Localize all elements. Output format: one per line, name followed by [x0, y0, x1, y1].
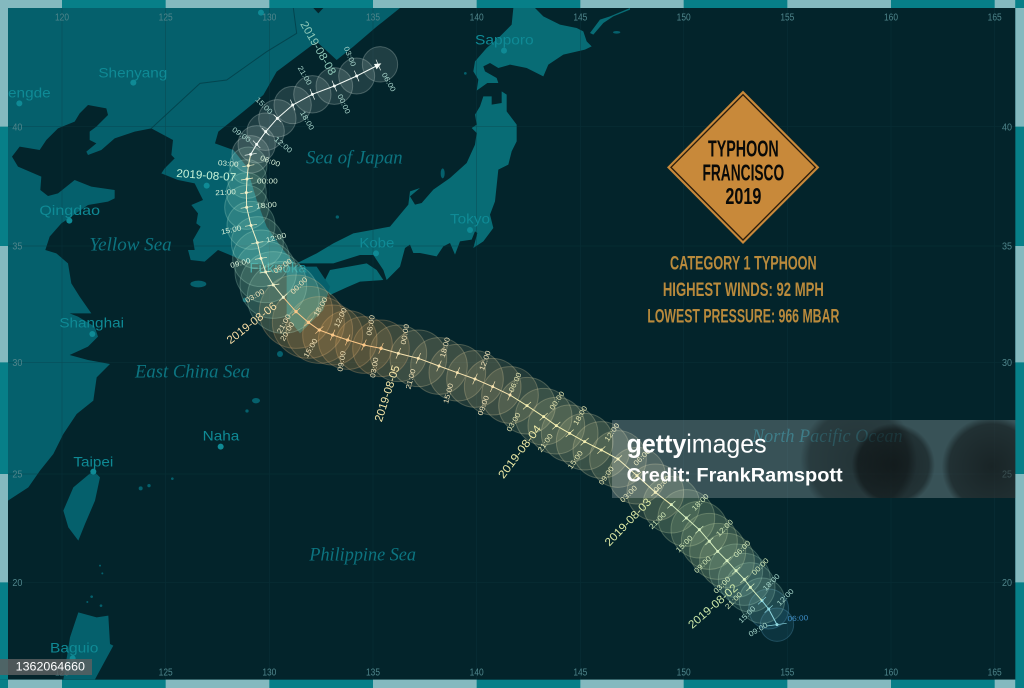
time labels along the track: 00:00 [257, 177, 278, 186]
axis labels: longitude and latitude: 35 [12, 242, 23, 253]
time labels along the track: 00:00 [288, 275, 309, 296]
sea labels: East China Sea [134, 361, 250, 382]
land: Luzon [63, 612, 113, 679]
axis labels: longitude and latitude: 125 [159, 668, 173, 679]
axis labels: longitude and latitude: 160 [884, 668, 898, 679]
land: Jeju and small islands [86, 31, 620, 607]
city labels and dots: Tokyo [450, 210, 490, 226]
date labels along the track: 2019-08-08 [297, 20, 338, 77]
time labels along the track: 00:00 [750, 556, 771, 577]
border: bottom scale [0, 680, 1024, 688]
land: Shikoku [323, 263, 383, 295]
date labels along the track: 2019-08-02 [686, 582, 740, 631]
watermark logo text: gettyimages [627, 428, 767, 458]
time labels along the track: 18:00 [761, 572, 782, 593]
time labels along the track: 12:00 [775, 587, 796, 608]
axis labels: longitude and latitude: 30 [1002, 358, 1012, 369]
city labels and dots: Fukuoka [249, 260, 307, 276]
date labels along the track: 2019-08-03 [603, 496, 654, 549]
time labels along the track: 00:00 [547, 390, 567, 412]
time labels along the track: 21:00 [536, 432, 555, 454]
time labels along the track: 18:00 [690, 492, 711, 513]
time labels along the track: 06:00 [631, 447, 652, 468]
time labels along the track: 03:00 [618, 483, 639, 504]
land: Taiwan [63, 471, 100, 541]
time labels along the track: 21:00 [723, 590, 744, 611]
border: right scale [1015, 0, 1024, 688]
time labels along the track: 09:00 [335, 350, 348, 372]
axis labels: longitude and latitude: 20 [1002, 578, 1012, 589]
axis labels: longitude and latitude: 135 [366, 668, 380, 679]
axis labels: longitude and latitude: 25 [1002, 470, 1012, 481]
time labels along the track: 09:00 [476, 394, 491, 417]
time labels along the track: 15:00 [301, 337, 320, 359]
city labels and dots: Shenyang [98, 64, 167, 80]
time labels along the track: 03:00 [504, 411, 523, 433]
city labels and dots: Baguio [50, 639, 99, 655]
border: left scale [0, 8, 8, 680]
sea labels: Philippine Sea [308, 545, 416, 566]
time labels along the track: 09:00 [692, 554, 713, 575]
city labels and dots: Sapporo [475, 31, 534, 47]
time labels along the track: 12:00 [332, 306, 349, 329]
storm statistics text: HIGHEST WINDS: 92 MPH [663, 280, 824, 301]
time labels along the track: 06:00 [507, 371, 524, 394]
storm track line with ticks and points [240, 60, 787, 626]
image id badge [0, 659, 92, 675]
land: Honshu [297, 91, 517, 280]
land: Kuril tips [590, 8, 630, 35]
city labels and dots: Taipei [73, 454, 113, 470]
time labels along the track: 06:00 [272, 256, 294, 276]
time labels along the track: 12:00 [272, 135, 294, 155]
storm statistics text: CATEGORY 1 TYPHOON [670, 254, 817, 275]
date labels along the track: 2019-08-04 [496, 423, 544, 481]
land: Hokkaido [473, 8, 592, 91]
time labels along the track: 18:00 [438, 336, 452, 358]
time labels along the track: 03:00 [711, 574, 732, 595]
time labels along the track: 12:00 [265, 231, 287, 245]
time labels along the track: 06:00 [731, 538, 752, 559]
axis labels: longitude and latitude: 150 [677, 12, 691, 23]
time labels along the track: 00:00 [651, 473, 672, 494]
time labels along the track: 03:00 [244, 287, 266, 305]
time labels along the track: 21:00 [296, 64, 314, 87]
axis labels: longitude and latitude: 30 [12, 358, 23, 369]
time labels along the track: 18:00 [311, 296, 330, 318]
axis labels: longitude and latitude: 35 [1002, 242, 1012, 253]
axis labels: longitude and latitude: 155 [780, 12, 795, 23]
axis labels: longitude and latitude: 140 [470, 668, 484, 679]
border: top scale [0, 0, 1024, 8]
time labels along the track: 09:00 [230, 125, 252, 144]
time labels along the track: 15:00 [220, 223, 242, 236]
map: land masses [8, 8, 630, 679]
time labels along the track: 09:00 [229, 256, 251, 270]
time labels along the track: 15:00 [441, 382, 455, 404]
axis labels: longitude and latitude: 130 [262, 668, 277, 679]
image id badge: 1362064660 [16, 660, 85, 674]
date labels along the track: 2019-08-07 [176, 168, 237, 184]
title text: FRANCISCO [702, 159, 784, 185]
time labels along the track: 15:00 [254, 95, 275, 116]
axis labels: longitude and latitude: 125 [159, 12, 173, 23]
title text: 2019 [725, 183, 761, 209]
watermark band [612, 420, 1016, 498]
date labels along the track [176, 20, 740, 631]
time labels along the track: 21:00 [404, 368, 418, 390]
axis labels: longitude and latitude: 135 [366, 12, 380, 23]
city labels and dots [8, 10, 534, 661]
axis labels: longitude and latitude: 145 [573, 668, 588, 679]
axis labels: longitude and latitude: 25 [12, 470, 23, 481]
time labels along the track: 21:00 [275, 313, 293, 335]
road-sign title diamond [667, 91, 819, 244]
time labels along the track: 15:00 [566, 449, 585, 471]
land border lines [151, 8, 297, 128]
axis labels: longitude and latitude: 40 [1002, 122, 1012, 133]
date labels along the track: 2019-08-06 [225, 300, 279, 347]
axis labels: longitude and latitude: 165 [988, 12, 1002, 23]
time labels along the track: 09:00 [747, 620, 769, 639]
time labels along the track: 15:00 [674, 533, 695, 554]
time labels along the track: 12:00 [477, 349, 493, 372]
time labels along the track: 06:00 [364, 314, 377, 336]
time labels along the track: 15:00 [736, 604, 757, 625]
sea labels [89, 147, 903, 566]
watermark credit text: Credit: FrankRamspott [627, 466, 843, 487]
time labels along the track: 03:00 [218, 158, 239, 169]
time labels along the track: 00:00 [335, 93, 352, 115]
axis labels: longitude and latitude: 20 [12, 578, 23, 589]
sea labels: Yellow Sea [89, 235, 172, 256]
time labels along the track: 20:00 [278, 320, 296, 343]
axis labels: longitude and latitude: 160 [884, 12, 898, 23]
storm wind-radius circles [225, 47, 794, 641]
axis labels: longitude and latitude: 120 [55, 668, 69, 679]
date labels along the track: 2019-08-05 [373, 364, 403, 423]
city labels and dots: Naha [203, 428, 240, 444]
time labels along the track: 21:00 [215, 187, 236, 197]
icon: track end arrow [374, 63, 381, 69]
axis labels: longitude and latitude: 120 [55, 12, 69, 23]
time labels along the track: 00:00 [399, 323, 411, 345]
time labels along the track [215, 45, 808, 639]
axis labels: longitude and latitude: 150 [677, 668, 691, 679]
axis labels: longitude and latitude: 40 [12, 122, 23, 133]
axis labels: longitude and latitude: 165 [988, 668, 1002, 679]
city labels and dots: Shanghai [59, 315, 124, 331]
sea labels: North Pacific Ocean [751, 426, 903, 447]
time labels along the track: 18:00 [256, 200, 277, 211]
time labels along the track: 18:00 [571, 404, 589, 427]
title text: TYPHOON [708, 136, 779, 162]
sea labels: Sea of Japan [306, 147, 403, 168]
land: Kyushu [287, 267, 330, 333]
city labels and dots: engde [8, 84, 51, 100]
storm statistics text [647, 254, 839, 327]
time labels along the track: 12:00 [602, 421, 622, 443]
time labels along the track: 21:00 [647, 510, 668, 531]
axis labels: longitude and latitude: 140 [470, 12, 484, 23]
axis labels: longitude and latitude: 155 [780, 668, 795, 679]
storm statistics text: LOWEST PRESSURE: 966 MBAR [647, 306, 839, 327]
time labels along the track: 03:00 [368, 357, 380, 379]
land: Asian mainland and Korea [8, 8, 400, 501]
time labels along the track: 18:00 [298, 109, 316, 132]
time labels along the track: 09:00 [597, 465, 616, 487]
city labels and dots: Qingdao [39, 202, 100, 218]
time labels along the track: 12:00 [714, 517, 735, 538]
city labels and dots: Kobe [359, 235, 395, 251]
time labels along the track: 06:00 [787, 613, 808, 623]
time labels along the track: 06:00 [380, 71, 398, 93]
axis labels: longitude and latitude: 130 [262, 12, 277, 23]
title text [702, 136, 784, 209]
axis labels: longitude and latitude: 145 [573, 12, 588, 23]
time labels along the track: 03:00 [342, 45, 358, 68]
time labels along the track: 06:00 [259, 153, 281, 169]
